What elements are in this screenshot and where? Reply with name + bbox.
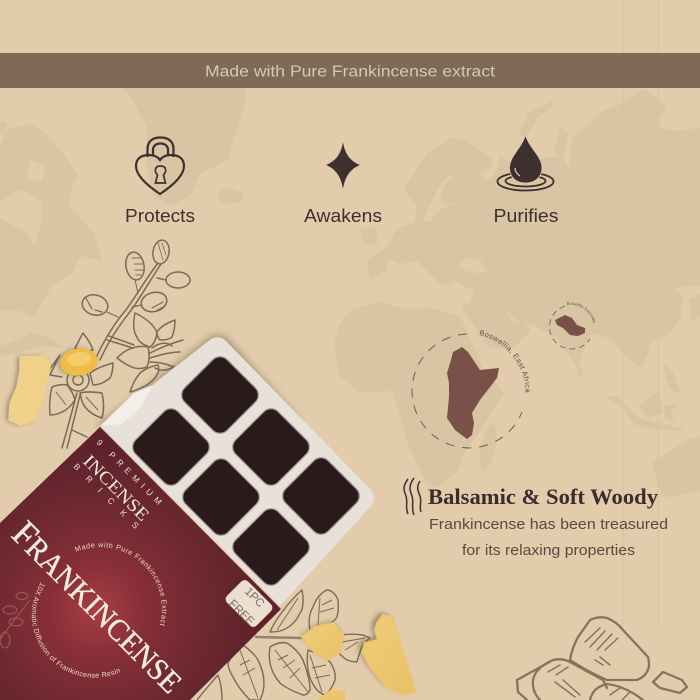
box circular text: bottom: 10X Aromatic Diffusion of Frankincense Resin: [32, 582, 120, 678]
tag: 1 pc free: 1PC: [242, 586, 266, 610]
resin pieces: lower: [301, 612, 415, 700]
description text: [429, 517, 668, 559]
source map: east africa: [412, 330, 530, 448]
description heading: Balsamic & Soft Woody: [428, 484, 659, 509]
icon: heart padlock: [136, 138, 184, 194]
icon: oil drop with ripples: [498, 135, 554, 190]
box circular text: top: Made with Pure Frankincense Extract: [74, 542, 167, 626]
small herb illustration on box: [0, 592, 30, 648]
icon: smoke waves: [404, 478, 421, 515]
icon: four-point star: [326, 142, 360, 189]
benefit: protects: [125, 138, 195, 226]
dashed circle: [550, 306, 590, 349]
brick 5: [279, 454, 363, 538]
flower lower left: [47, 333, 113, 448]
source map: east india: [549, 302, 596, 350]
benefit: protects: Protects: [125, 205, 195, 226]
region: east india: [555, 315, 585, 336]
benefit: awakens: Awakens: [304, 205, 382, 226]
product: blister tray: [100, 337, 374, 606]
benefit: awakens: [304, 142, 382, 226]
faint panel fold lines: [623, 0, 658, 625]
benefit: purifies: [494, 135, 558, 226]
lighter inland seas: [0, 160, 520, 323]
product tray shadow: [98, 335, 300, 520]
botanical sketch: upper branch: [47, 239, 190, 448]
tag: 1 pc free: [224, 578, 274, 629]
description text: for its relaxing properties: [462, 543, 635, 559]
dashed circle: [412, 334, 522, 448]
label: Boswellia, East Africa: [480, 330, 530, 393]
box label: incense: INCENSE: [79, 451, 153, 525]
brick 2: [129, 405, 213, 489]
world map silhouette: [0, 88, 700, 497]
description text: Frankincense has been treasured: [429, 517, 668, 533]
region: east africa: [447, 347, 499, 439]
brick 6: [229, 505, 313, 589]
botanical sketch: lower branch: [197, 590, 370, 700]
label: Boswellia, East India: [566, 302, 596, 324]
resin pieces: left: [6, 346, 100, 425]
brick 3: [229, 405, 313, 489]
brick 4: [179, 455, 263, 539]
top banner: Made with Pure Frankincense extract: [205, 64, 496, 80]
box label: 9 premium: 9 PREMIUM: [95, 437, 164, 507]
benefit: purifies: Purifies: [494, 205, 558, 226]
product: red box: [0, 427, 281, 700]
top banner: [0, 53, 700, 88]
tag: 1 pc free: FREE: [226, 598, 256, 628]
botanical sketch: resin stones: [517, 617, 687, 700]
box label: bricks: BRICKS: [72, 461, 141, 531]
brick 1: [178, 353, 262, 437]
